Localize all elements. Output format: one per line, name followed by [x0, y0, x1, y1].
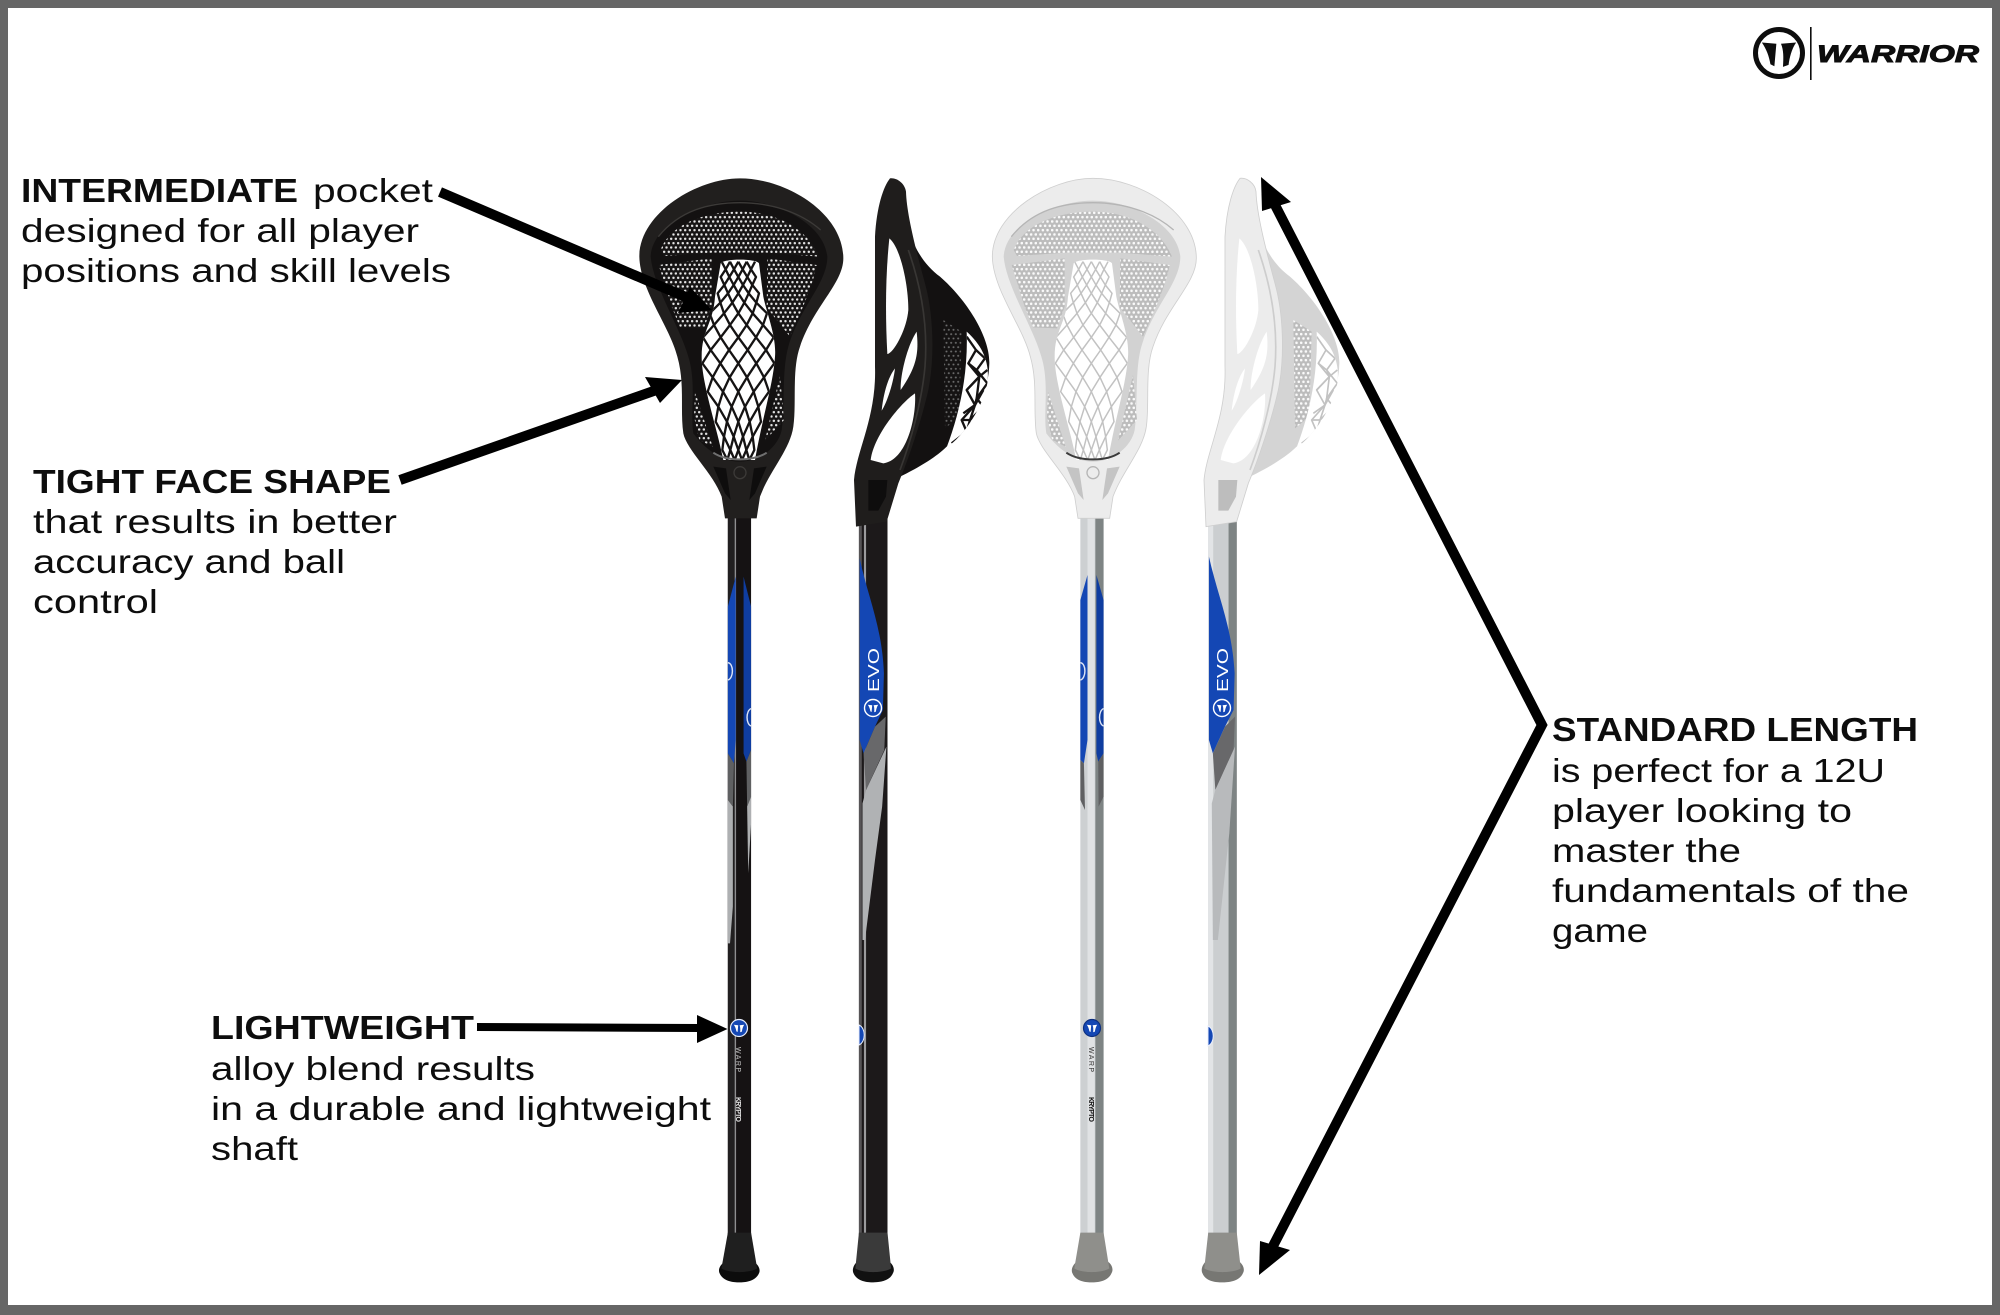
logo: Warrior: [1756, 27, 1980, 80]
shaft 1 print: [734, 1047, 741, 1123]
callout: standard length: game: [1552, 912, 1648, 949]
callout: intermediate pocket: [21, 172, 451, 289]
arrow: to head face: [400, 377, 682, 480]
callout: lightweight: in a durable and lightweight: [211, 1090, 711, 1127]
badge 2: [864, 700, 882, 716]
badge 1: [730, 1020, 748, 1036]
stick 2: black side view: [853, 178, 989, 1282]
shaft 1 print: WARP: [734, 1047, 741, 1072]
shaft 3 print: WARP: [1087, 1047, 1094, 1072]
badge 4: [1214, 700, 1230, 716]
icon: Warrior circle mark: [1756, 30, 1802, 76]
butt end 4: [1202, 1233, 1244, 1282]
callout: tight face shape: control: [33, 583, 158, 620]
callout: tight face shape: TIGHT FACE SHAPE: [33, 463, 391, 500]
callout: tight face shape: that results in better: [33, 503, 397, 540]
callout: standard length: [1552, 711, 1918, 949]
callout: tight face shape: [33, 463, 397, 620]
badge 4 lower: [1208, 1026, 1213, 1046]
callout: lightweight: LIGHTWEIGHT: [211, 1009, 474, 1046]
shaft 3: [1080, 517, 1104, 1235]
callout: standard length: master the: [1552, 832, 1741, 869]
butt end 3: [1072, 1233, 1112, 1282]
shaft 4: [1208, 517, 1237, 1235]
callout: intermediate pocket: INTERMEDIATE: [21, 172, 298, 209]
label: EVO: EVO: [866, 648, 883, 692]
arrow: to pocket: [440, 192, 712, 313]
shaft 3 print: [1087, 1047, 1094, 1123]
callout: standard length: fundamentals of the: [1552, 872, 1909, 909]
callout: lightweight: shaft: [211, 1130, 298, 1167]
head 1: [639, 178, 843, 518]
wordmark: WARRIOR: WARRIOR: [1817, 41, 1980, 68]
badge 3: [1084, 1020, 1100, 1036]
arrow: to shaft: [477, 1015, 728, 1043]
shaft 2: [859, 517, 887, 1235]
callout: standard length: player looking to: [1552, 792, 1852, 829]
callout: intermediate pocket: pocket: [313, 172, 433, 209]
callout: intermediate pocket: designed for all player: [21, 212, 419, 249]
callout: standard length: STANDARD LENGTH: [1552, 711, 1918, 748]
label: EVO: EVO: [1215, 648, 1232, 692]
callout: tight face shape: accuracy and ball: [33, 543, 345, 580]
stick 3: white front view: [992, 178, 1196, 1282]
head 2: [854, 178, 989, 527]
butt end 2: [853, 1233, 894, 1282]
shaft 1: [728, 518, 751, 1236]
arrow: length bracket: [1259, 177, 1542, 1275]
callout: lightweight: alloy blend results: [211, 1050, 535, 1087]
stick 4: white side view: [1202, 178, 1339, 1282]
shaft 1 print: KRYPTO: [734, 1097, 741, 1123]
shaft 3 print: KRYPTO: [1087, 1097, 1094, 1123]
head 4: [1204, 178, 1339, 527]
callout: intermediate pocket: positions and skill levels: [21, 252, 451, 289]
butt end 1: [719, 1233, 760, 1282]
stick 1: black front view: [639, 178, 843, 1282]
callout: standard length: is perfect for a 12U: [1552, 752, 1885, 789]
head 3: [992, 178, 1196, 518]
callout: lightweight: [211, 1009, 711, 1167]
badge 2 lower: [859, 1025, 864, 1045]
